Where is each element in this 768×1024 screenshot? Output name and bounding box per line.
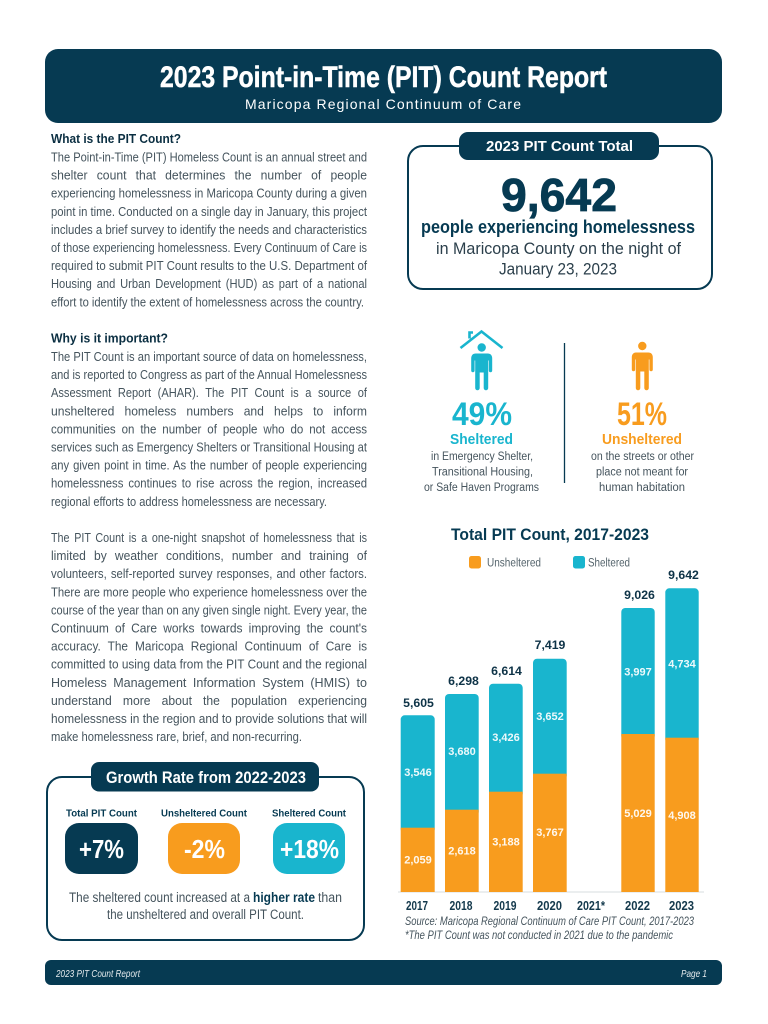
- tile: sheltered count: [272, 808, 346, 874]
- sheltered description: Transitional Housing,: [432, 466, 533, 478]
- paragraph: PIT count limits: Continuum of Care works towards improving the count's: [51, 622, 367, 636]
- chart source note: [405, 914, 694, 942]
- icon: person under roof: [460, 332, 502, 390]
- paragraph: why is it important: Assessment Report (AHAR). The PIT Count is a source of: [51, 386, 367, 400]
- total heading pill: [459, 132, 659, 160]
- tile: unsheltered count: -2%: [184, 834, 225, 864]
- paragraph: why is it important: any given point in time. As the number of people experiencing: [51, 459, 367, 473]
- bar 2023: 9,642: [668, 568, 699, 582]
- text block: why is it important: [51, 332, 367, 509]
- total description: January 23, 2023: [499, 260, 617, 278]
- bar 2022: [621, 588, 655, 892]
- paragraph: what is the PIT count: effort to identify the extent of homelessness across the country.: [51, 295, 364, 309]
- footer bar: 2023 PIT Count Report: [55, 968, 141, 980]
- bar 2019: 6,614: [491, 664, 522, 678]
- year axis labels: 2018: [450, 898, 472, 913]
- paragraph: PIT count limits: volunteers, self-reported survey responses, and other factors.: [51, 567, 367, 581]
- chart title: Total PIT Count, 2017-2023: [451, 526, 649, 544]
- tile: total PIT count: Total PIT Count: [66, 808, 137, 820]
- paragraph: why is it important: unsheltered homeless numbers and helps to inform: [51, 404, 367, 418]
- paragraph: what is the PIT count: Housing and Urban Development (HUD) as part of a national: [51, 277, 367, 291]
- year axis labels: 2021*: [577, 898, 606, 913]
- bar 2020: 3,767: [536, 827, 564, 839]
- unsheltered label: Unsheltered: [602, 431, 682, 448]
- sheltered label: Sheltered: [450, 431, 513, 448]
- growth rate takeaway: The sheltered count increased at a: [69, 890, 250, 905]
- chart source note: *The PIT Count was not conducted in 2021 due to the pandemic: [405, 928, 673, 942]
- growth rate takeaway: [69, 890, 342, 922]
- bar 2017: 5,605: [403, 696, 434, 710]
- year axis labels: 2019: [494, 898, 516, 913]
- bar 2019: 3,188: [492, 836, 520, 848]
- paragraph: why is it important: regional efforts to address homelessness are necessary.: [51, 495, 327, 509]
- paragraph: PIT count limits: understand more about the population experiencing: [51, 694, 367, 708]
- footer bar: Page 1: [681, 968, 707, 980]
- heading: what is the PIT count: What is the PIT Count?: [51, 132, 181, 146]
- bar 2020: 7,419: [535, 638, 566, 652]
- unsheltered percent: 51%: [617, 396, 667, 432]
- paragraph: why is it important: homelessness continues to rise across the region, increased: [51, 477, 367, 491]
- paragraph: PIT count limits: make homelessness rare, brief, and non-recurring.: [51, 730, 302, 744]
- paragraph: what is the PIT count: required to submit PIT Count results to the U.S. Department of: [51, 259, 367, 273]
- paragraph: what is the PIT count: point in time. Conducted on a single day in January, this project: [51, 205, 367, 219]
- paragraph: PIT count limits: homelessness in the region and to provide solutions that will: [51, 712, 367, 726]
- total description: [421, 217, 695, 278]
- bar 2023: 4,734: [668, 658, 697, 670]
- unsheltered description: on the streets or other: [591, 451, 694, 463]
- tile: total PIT count: +7%: [79, 834, 124, 864]
- paragraph: what is the PIT count: The Point-in-Time (PIT) Homeless Count is an annual street and: [51, 150, 367, 164]
- paragraph: PIT count limits: There are more people who experience homelessness over the: [51, 585, 367, 599]
- subtitle: Maricopa Regional Continuum of Care: [245, 96, 521, 112]
- bar 2017: 3,546: [404, 767, 432, 779]
- bar 2022: 3,997: [624, 666, 652, 678]
- unsheltered description: [591, 451, 694, 494]
- paragraph: what is the PIT count: includes a brief survey to identify the needs and characteristics: [51, 223, 367, 237]
- paragraph: PIT count limits: [51, 531, 367, 744]
- icon: person: [632, 342, 653, 390]
- year axis labels: 2017: [406, 898, 428, 913]
- unsheltered description: human habitation: [599, 482, 685, 494]
- chart legend: [469, 556, 630, 570]
- bar 2017: [401, 696, 435, 892]
- chart legend: Unsheltered: [487, 558, 541, 570]
- paragraph: what is the PIT count: of those experiencing homelessness. Every Continuum of Care is: [51, 241, 367, 255]
- sheltered description: or Safe Haven Programs: [424, 482, 539, 494]
- growth rate takeaway: higher rate: [253, 890, 315, 905]
- sheltered description: in Emergency Shelter,: [431, 451, 533, 463]
- bar 2017: 2,059: [404, 854, 432, 866]
- paragraph: PIT count limits: Homeless Management Information System (HMIS) to: [51, 676, 367, 690]
- paragraph: PIT count limits: accuracy. The Maricopa Regional Continuum of Care is: [51, 640, 367, 654]
- stat: sheltered: [424, 332, 539, 494]
- bar 2022: 5,029: [624, 808, 652, 820]
- growth rate takeaway: the unsheltered and overall PIT Count.: [107, 907, 304, 922]
- chart legend: Sheltered: [588, 558, 630, 570]
- paragraph: why is it important: services such as Emergency Shelters or Transitional Housing at: [51, 440, 367, 454]
- bar 2019: [489, 664, 523, 892]
- bar 2019: 3,426: [492, 732, 520, 744]
- bar 2023: 4,908: [668, 810, 696, 822]
- tile: unsheltered count: [161, 808, 247, 874]
- paragraph: what is the PIT count: [51, 150, 367, 309]
- year axis labels: 2020: [537, 898, 562, 913]
- tile: total PIT count: [65, 808, 138, 874]
- paragraph: what is the PIT count: shelter count that determines the number of people: [51, 169, 367, 183]
- tile: sheltered count: Sheltered Count: [272, 808, 346, 820]
- sheltered percent: 49%: [452, 396, 512, 432]
- paragraph: why is it important: The PIT Count is an important source of data on homelessness,: [51, 350, 367, 364]
- panel: growth rate: [47, 762, 364, 940]
- footer bar: [45, 960, 722, 985]
- unsheltered description: place not meant for: [596, 466, 688, 478]
- bar 2020: 3,652: [536, 711, 564, 723]
- bar 2018: [445, 674, 479, 892]
- year axis labels: [406, 898, 694, 913]
- year axis labels: 2023: [669, 898, 694, 913]
- tile: unsheltered count: Unsheltered Count: [161, 808, 247, 820]
- paragraph: PIT count limits: limited by weather conditions, number and training of: [51, 549, 367, 563]
- stat: unsheltered: [591, 342, 694, 494]
- total heading pill: 2023 PIT Count Total: [486, 139, 633, 155]
- bar 2018: 2,618: [448, 846, 476, 858]
- chart source note: Source: Maricopa Regional Continuum of Care PIT Count, 2017-2023: [405, 914, 694, 928]
- bar 2023: [665, 568, 699, 892]
- year axis labels: 2022: [625, 898, 650, 913]
- paragraph: PIT count limits: The PIT Count is a one-night snapshot of homelessness that is: [51, 531, 367, 545]
- title: 2023 Point-in-Time (PIT) Count Report: [160, 61, 607, 94]
- paragraph: what is the PIT count: experiencing homelessness in Maricopa County during a given: [51, 187, 367, 201]
- heading: why is it important: Why is it important?: [51, 332, 168, 346]
- text block: what is the PIT count: [51, 132, 367, 309]
- bar 2018: 3,680: [448, 746, 476, 758]
- growth rate heading pill: Growth Rate from 2022-2023: [106, 769, 306, 787]
- paragraph: PIT count limits: committed to using data from the PIT Count and the regional: [51, 658, 367, 672]
- big number: 9,642: [501, 169, 617, 221]
- growth rate takeaway: than: [318, 890, 342, 905]
- sheltered description: [424, 451, 539, 494]
- bar 2022: 9,026: [624, 588, 655, 602]
- paragraph: why is it important: communities on the number of people who do not access: [51, 422, 367, 436]
- header banner: [45, 49, 722, 123]
- tile: sheltered count: +18%: [280, 834, 339, 864]
- total description: people experiencing homelessness: [421, 217, 695, 237]
- growth rate heading pill: [91, 762, 319, 792]
- bar 2018: 6,298: [448, 674, 479, 688]
- paragraph: why is it important: and is reported to Congress as part of the Annual Homelessness: [51, 368, 367, 382]
- paragraph: why is it important: [51, 350, 367, 509]
- total description: in Maricopa County on the night of: [436, 239, 681, 258]
- bar 2020: [533, 638, 567, 892]
- stacked bar chart: [398, 568, 704, 913]
- paragraph: PIT count limits: course of the year than on any given single night. Every year, the: [51, 603, 367, 617]
- panel: PIT count total: [408, 132, 712, 289]
